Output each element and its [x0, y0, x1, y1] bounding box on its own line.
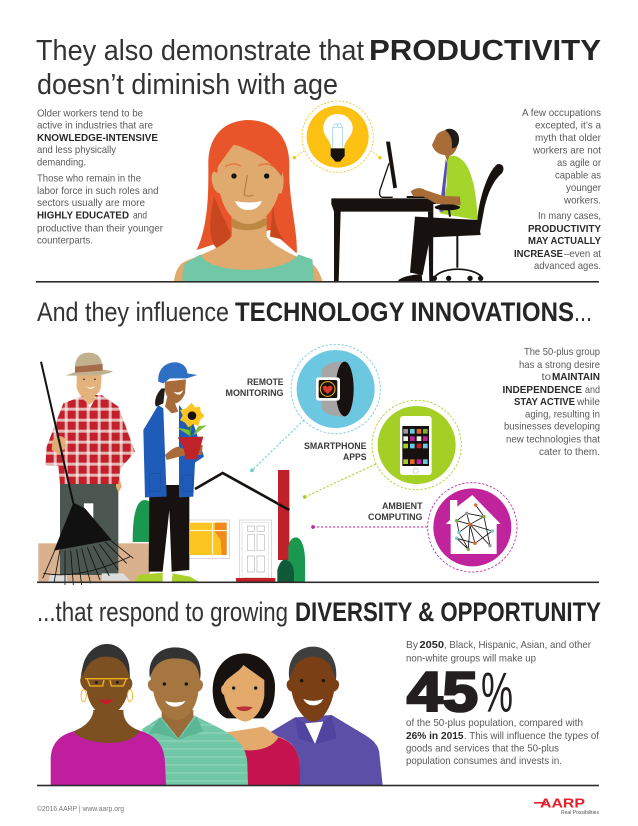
text block: compared with 2015: population consumes and invests in. [406, 756, 562, 767]
illustration: man working at desk [331, 129, 503, 282]
heading: productivity: doesn’t diminish with age [37, 69, 338, 101]
heading: diversity and opportunity [37, 597, 601, 627]
text block: older workers: and [133, 210, 147, 222]
heading: productivity: PRODUCTIVITY [369, 35, 601, 67]
text block: older workers: sectors usually are more [37, 198, 145, 209]
text block: myth about productivity: PRODUCTIVITY [528, 224, 601, 235]
text block: 50-plus group: to [542, 372, 551, 383]
text block: older workers: productive than their younger [37, 224, 163, 234]
text block: compared with 2015: 26% in 2015 [406, 731, 464, 742]
text block: myth about productivity: younger [566, 183, 601, 194]
text block: compared with 2015: . This will influence the types of [464, 731, 599, 742]
text block: 50-plus group: aging, resulting in [525, 410, 600, 420]
text block: by 2050 intro [406, 640, 591, 664]
label: smartphone apps [304, 441, 366, 462]
label: smartphone apps: SMARTPHONE [304, 441, 366, 451]
text block: older workers: Older workers tend to be [37, 108, 143, 120]
icon: light bulb [293, 101, 382, 172]
logo: AARP: AARP [540, 796, 585, 810]
icon: smartwatch circle [250, 344, 380, 472]
text block: by 2050 intro: By [406, 640, 419, 651]
text block: older workers: Those who remain in the [37, 174, 141, 184]
icon: smartphone circle [303, 400, 461, 499]
text block: myth about productivity: A few occupations [522, 108, 601, 119]
person: woman in magenta top [51, 644, 166, 785]
heading: technology innovations: TECHNOLOGY INNOVATIONS [235, 297, 574, 327]
heading: diversity and opportunity: ...that respond to growing [37, 597, 288, 627]
person: woman with black bob [213, 653, 300, 785]
text block: older workers: labor force in such roles and [37, 186, 159, 197]
text block: compared with 2015 [406, 718, 599, 767]
text block: by 2050 intro: , Black, Hispanic, Asian, and other [444, 640, 591, 651]
heading: technology innovations: ... [574, 297, 592, 327]
text block: myth about productivity: capable as [555, 170, 601, 182]
text block: 50-plus group: STAY ACTIVE [514, 397, 575, 408]
person: man in mint shirt [142, 647, 248, 785]
text block: older workers: demanding. [37, 158, 86, 168]
text block: myth about productivity [514, 108, 602, 272]
illustration: older man with rake [41, 353, 135, 585]
text block: older workers: and less physically [37, 145, 117, 156]
text block: myth about productivity: myth that older [535, 133, 602, 144]
logo: AARP [534, 796, 599, 816]
statistic: 45 percent: % [481, 660, 513, 724]
statistic: 45 percent [407, 660, 513, 724]
label: remote monitoring [226, 377, 284, 398]
text block: compared with 2015: of the 50-plus population, compared with [406, 718, 583, 729]
text block: 50-plus group: INDEPENDENCE [502, 385, 582, 396]
text block: myth about productivity: excepted, it’s a [535, 120, 601, 132]
text block: myth about productivity: workers are not [532, 146, 601, 156]
label: ambient computing: COMPUTING [368, 512, 422, 522]
text block: myth about productivity: MAY ACTUALLY [528, 236, 601, 247]
heading: technology innovations: And they influence [37, 297, 229, 327]
text block: older workers: HIGHLY EDUCATED [37, 210, 129, 222]
text block: 50-plus group [502, 347, 600, 458]
label: smartphone apps: APPS [343, 452, 366, 462]
text block: older workers [37, 108, 163, 246]
label: remote monitoring: MONITORING [226, 388, 284, 398]
text block: myth about productivity: advanced ages. [534, 261, 601, 272]
text block: 50-plus group: cater to them. [539, 447, 600, 458]
text block: 50-plus group: new technologies that [506, 434, 600, 446]
text block: 50-plus group: businesses developing [504, 422, 600, 432]
footer: copyright: ©2016 AARP | www.aarp.org [37, 804, 124, 813]
heading: technology innovations [37, 297, 592, 327]
illustration: woman with red hair [174, 120, 323, 282]
heading: productivity [36, 35, 601, 101]
illustration: house [38, 470, 305, 582]
text block: myth about productivity: In many cases, [538, 211, 601, 222]
text block: older workers: active in industries that are [37, 120, 153, 132]
text block: by 2050 intro: non-white groups will make up [406, 654, 536, 664]
text block: 50-plus group: has a strong desire [519, 360, 600, 371]
icon: smart home circle [311, 483, 517, 572]
text block: 50-plus group: and [585, 385, 600, 396]
illustration: four diverse older adults [51, 644, 383, 785]
person: man in purple shirt [268, 647, 383, 785]
text block: older workers: counterparts. [37, 236, 93, 246]
label: ambient computing [368, 501, 423, 522]
label: ambient computing: AMBIENT [382, 501, 423, 511]
text block: myth about productivity: workers. [563, 196, 601, 206]
statistic: 45 percent: 45 [407, 660, 478, 723]
text block: myth about productivity: INCREASE [514, 249, 563, 260]
text block: 50-plus group: The 50-plus group [524, 347, 600, 358]
text block: older workers: KNOWLEDGE-INTENSIVE [37, 133, 158, 144]
text block: 50-plus group: MAINTAIN [552, 372, 600, 383]
text block: 50-plus group: while [576, 397, 600, 408]
heading: productivity: They also demonstrate that [36, 35, 364, 67]
text block: myth about productivity: –even at [564, 249, 601, 260]
illustration: woman with sunflower [135, 362, 207, 582]
text block: by 2050 intro: 2050 [420, 640, 444, 651]
logo: AARP: Real Possibilities [561, 810, 599, 816]
label: remote monitoring: REMOTE [247, 377, 284, 387]
text block: myth about productivity: as agile or [557, 158, 601, 169]
text block: compared with 2015: goods and services that the 50-plus [406, 744, 559, 754]
